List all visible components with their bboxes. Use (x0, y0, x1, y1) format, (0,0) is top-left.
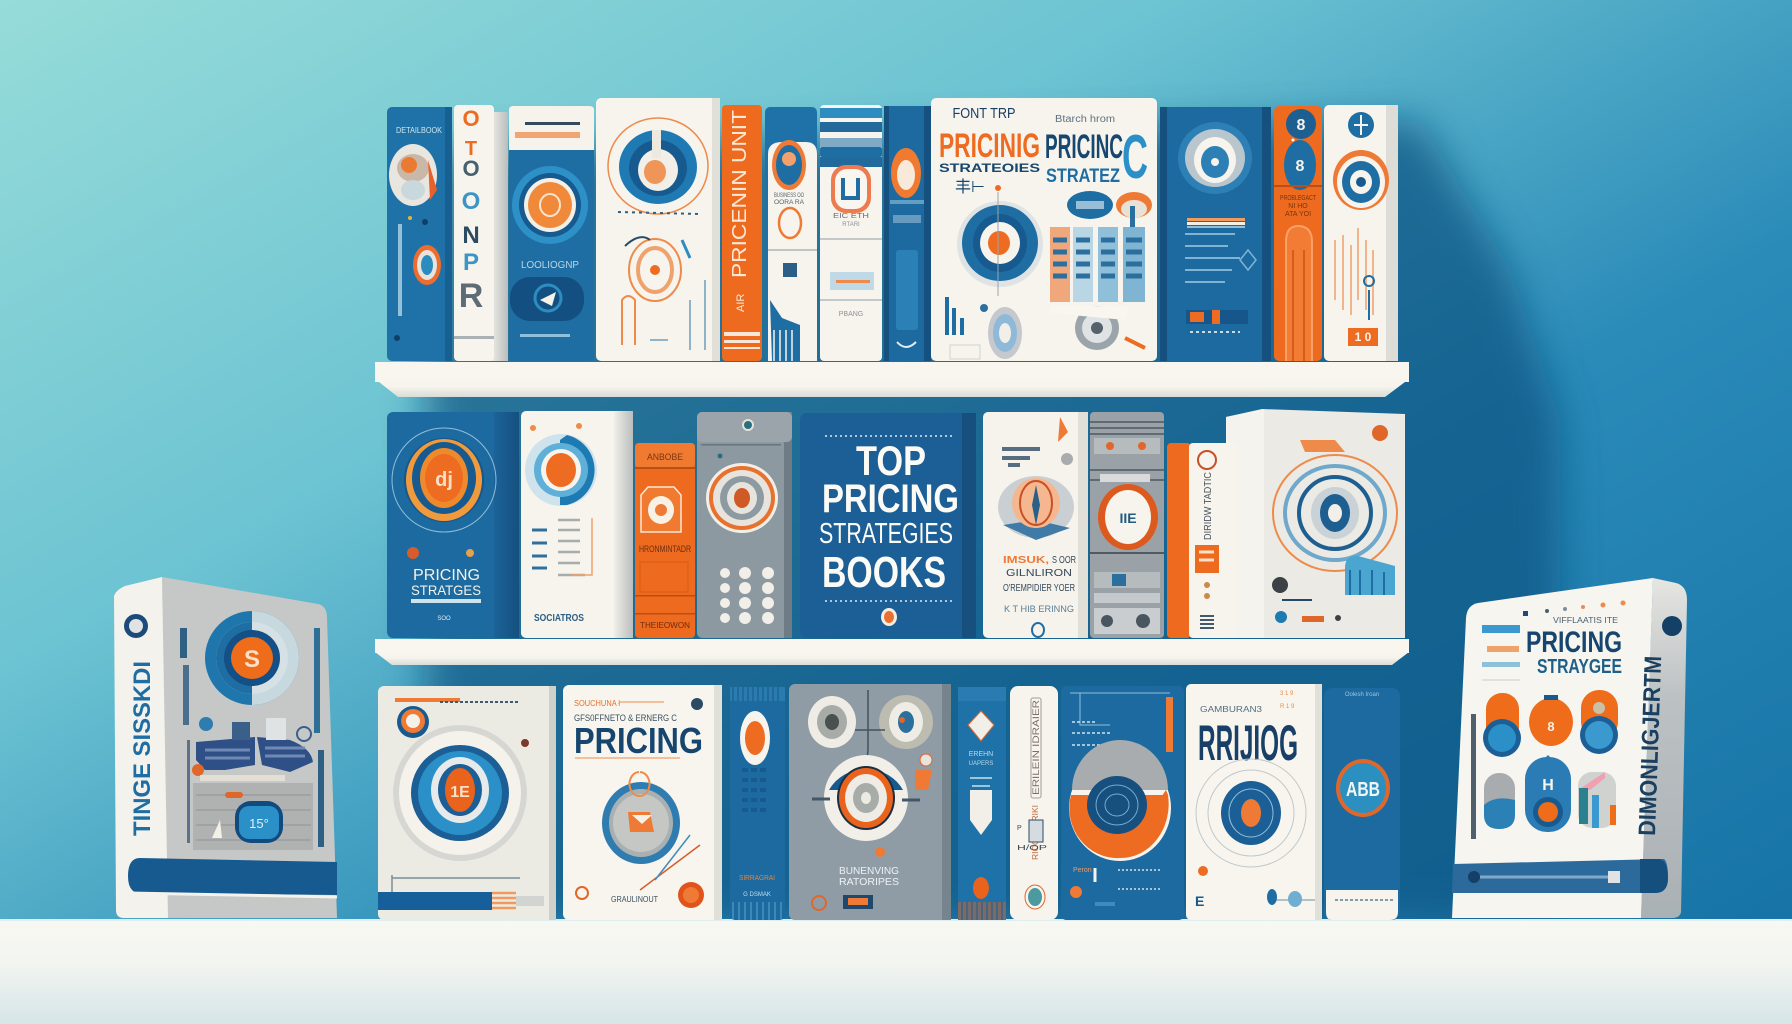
book: white spine 2 with stacked letters: P (463, 249, 479, 276)
book: white spine 2 with stacked letters: O (462, 106, 480, 131)
book: blue spine with diamond (958, 687, 1006, 920)
book: short orange spine: THEIEOWON (640, 621, 690, 630)
book: white cover with text: S OOR (1052, 555, 1076, 566)
book: white cover with text: O'REMPIDIER YOER (1003, 583, 1075, 594)
book: white cover with dark title: R 1 9 (1280, 704, 1295, 710)
dots row (1523, 600, 1626, 616)
book: white cover with text (983, 412, 1088, 638)
book: short orange spine (635, 443, 695, 638)
text: small caption: VIFFLAATIS ITE (1553, 616, 1618, 625)
book: white striped spine 7: PBANG (839, 311, 863, 318)
book: white spine 2 with stacked letters (454, 105, 508, 361)
book: orange spine 11: 8 (1297, 117, 1306, 134)
book: central title cover: TOP (856, 437, 926, 484)
book: narrow white spine (1010, 686, 1058, 920)
label: spine title: DIMONLIGJERTM (1634, 655, 1667, 836)
book: white cover with dark title: 3 1 9 (1280, 691, 1294, 697)
illustration: cover machinery (180, 628, 324, 850)
book: white cover with rings (521, 411, 633, 638)
book: blue pricing strategies cover: PRICING (413, 567, 480, 584)
book: cream cover with target (378, 686, 556, 920)
book: large pricing strategies cover 9: FONT TRP (952, 105, 1016, 122)
book: standing right volume (1452, 578, 1687, 918)
book: blue cover with orange disc: Peron (1073, 867, 1092, 874)
book: white striped spine 7: RTARI (842, 222, 860, 228)
book: narrow white spine: P (1017, 825, 1022, 832)
emblem: spine badge (1662, 616, 1682, 636)
book: large pricing strategies cover 9: C (1122, 123, 1148, 192)
book: standing left volume (114, 577, 337, 918)
book: large pricing strategies cover 9 (931, 98, 1157, 361)
book: large pricing strategies cover 9: PRICINIG (939, 127, 1040, 165)
book: white spine 2 with stacked letters: R (459, 277, 483, 315)
text: pricing heading: PRICING (1526, 626, 1622, 659)
book: orange and white spine: DIRIDW TADTIC (1203, 472, 1214, 540)
book: short orange spine: HRONMINTADR (639, 544, 691, 554)
dial: orange target: S (244, 646, 260, 673)
book: blue and white spine 6: OORA RA (774, 200, 804, 206)
shelf shadow on wall (425, 120, 1560, 925)
book: blue and white spine 6 (765, 107, 817, 361)
band: navy strip (1452, 859, 1668, 893)
book: gray cover with targets: RATORIPES (839, 877, 899, 888)
book: blue striped spine: SIRRAGRAI (739, 875, 775, 882)
book: white spine 12: 1 0 (1355, 330, 1372, 344)
book: blue volume 3 with target: LOOLIOGNP (521, 260, 579, 271)
book: white pricing cover: GFS0FFNETO & ERNERG C (574, 713, 677, 723)
book: blue volume 3 with target (509, 106, 594, 361)
book: narrow white spine: RIOCEHBRIKI (1031, 805, 1040, 860)
spine: white edge (114, 577, 168, 918)
book: white volume 4 with target (596, 98, 720, 361)
book: white pricing cover: PRICING (574, 720, 703, 761)
book: large pricing strategies cover 9: Btarch hrom (1055, 114, 1115, 125)
book: cream cover with target: 1E (450, 784, 470, 801)
book: white cover with dark title: E (1195, 893, 1204, 909)
icon group: upper orange tabs: 8 (1547, 719, 1555, 734)
book: orange spine 5: AIR (735, 294, 747, 312)
book: white striped spine 7: EIC ETH (833, 213, 869, 220)
book: blue spine 8 (884, 106, 931, 361)
book: white spine 2 with stacked letters: N (462, 222, 480, 249)
book: central title cover: STRATEGIES (819, 518, 953, 550)
book: orange and white spine (1167, 443, 1237, 638)
book: gray cover with dots (697, 412, 792, 638)
book: central title cover: BOOKS (822, 548, 946, 597)
book: white spine 12 (1324, 105, 1398, 361)
cover: gray face (162, 577, 337, 918)
book: orange spine 11: PROBLEGACT (1280, 195, 1317, 202)
book: white pricing cover: SOUCHUNA ł (574, 699, 620, 708)
book: blue pricing strategies cover: dj (435, 469, 453, 491)
book: gray striped spine (1090, 412, 1164, 638)
book: large pricing strategies cover 9: 丰⊢ (955, 178, 985, 196)
book: blue striped spine: G DSMAK (743, 892, 771, 898)
book: blue spine 1 (387, 107, 452, 361)
emblem: spine badge (124, 614, 148, 638)
text: strategies subheading: STRAYGEE (1537, 656, 1622, 678)
book: blue spine 1: DETAILBOOK (396, 126, 443, 135)
book: large pricing strategies cover 9: STRATEOIES (939, 161, 1040, 175)
book: white cover with swirling rings (1226, 409, 1405, 638)
icon group: lower panels (1484, 755, 1616, 832)
book: orange spine 11 (1274, 106, 1322, 361)
middle shelf board (375, 639, 1409, 665)
book: blue and white spine 6: BUSINESS OO (774, 193, 804, 199)
book: blue pricing strategies cover (387, 412, 519, 638)
book: orange spine 11: NI HO (1288, 203, 1308, 210)
book: orange spine 5: PRICENIN UNIT (729, 110, 751, 278)
marker: thin vertical bar (1471, 714, 1476, 839)
book: blue striped spine (730, 687, 785, 920)
icon group: upper orange tabs (1483, 690, 1618, 757)
book: narrow white spine: H/OP (1017, 845, 1048, 852)
book: large pricing strategies cover 9: PRICINC (1045, 128, 1123, 166)
book: large pricing strategies cover 9: STRATEZ (1046, 166, 1120, 187)
chart: small table (1482, 625, 1520, 680)
band: navy strip (128, 858, 337, 895)
book: white cover with text: GILNLIRON (1006, 568, 1072, 579)
book: narrow white spine: ERILEIN IDRAIER (1031, 699, 1041, 795)
book: blue cover with orange disc (1061, 686, 1184, 920)
book: blue pricing strategies cover: STRATGES (411, 582, 481, 598)
book: white pricing cover: GRAULINOUT (611, 895, 658, 904)
illustration: cover machinery: 15° (249, 816, 269, 831)
dial: orange target (205, 611, 299, 705)
book: gray cover with targets (789, 684, 951, 920)
label: spine title: TINGE SISSKDI (129, 661, 156, 836)
book: white cover with dark title (1186, 684, 1322, 920)
book: gray cover with targets: BUNENVING (839, 866, 899, 877)
book: short orange spine: ANBOBE (647, 452, 683, 462)
book: white cover with text: K T HIB ERINNG (1004, 604, 1074, 614)
book: white cover with text: IMSUK, (1003, 555, 1049, 566)
book: white cover with dark title: GAMBURAN3 (1200, 705, 1263, 714)
book: blue spine with badge: ABB (1346, 779, 1380, 801)
book: blue cover 10 (1160, 107, 1271, 361)
book: blue spine with diamond: UAPERS (969, 761, 993, 767)
book: blue spine with badge (1324, 688, 1400, 920)
book: central title cover (800, 413, 976, 638)
spine: gray side (1641, 578, 1687, 918)
cover: white face (1452, 578, 1653, 918)
book: white striped spine 7 (820, 105, 882, 361)
book: white spine 2 with stacked letters: O (462, 156, 480, 181)
top shelf board (375, 362, 1409, 397)
book: blue spine with badge: Oolesh Iroan (1345, 692, 1379, 698)
middle shelf books (387, 409, 1405, 638)
book: gray striped spine: IIE (1119, 510, 1137, 526)
book: central title cover: PRICING (822, 477, 959, 521)
bottom shelf books (378, 684, 1400, 920)
floor surface (0, 919, 1792, 1024)
book: orange spine 11: ATA YOI (1285, 211, 1311, 218)
book: orange spine 11: 8 (1296, 158, 1305, 175)
top shelf books (387, 98, 1398, 361)
book: white cover with dark title: RRIJIOG (1198, 715, 1298, 771)
icon group: lower panels: H (1542, 777, 1554, 794)
book: white spine 2 with stacked letters: T (465, 138, 477, 160)
book: orange spine 5 (722, 105, 762, 361)
book: white pricing cover (563, 685, 722, 920)
book: white spine 2 with stacked letters: O (462, 188, 480, 215)
book: blue spine with diamond: EREHN (969, 751, 993, 758)
book: white cover with rings: SOCIATROS (534, 613, 584, 624)
book: blue pricing strategies cover: SOO (437, 616, 451, 622)
